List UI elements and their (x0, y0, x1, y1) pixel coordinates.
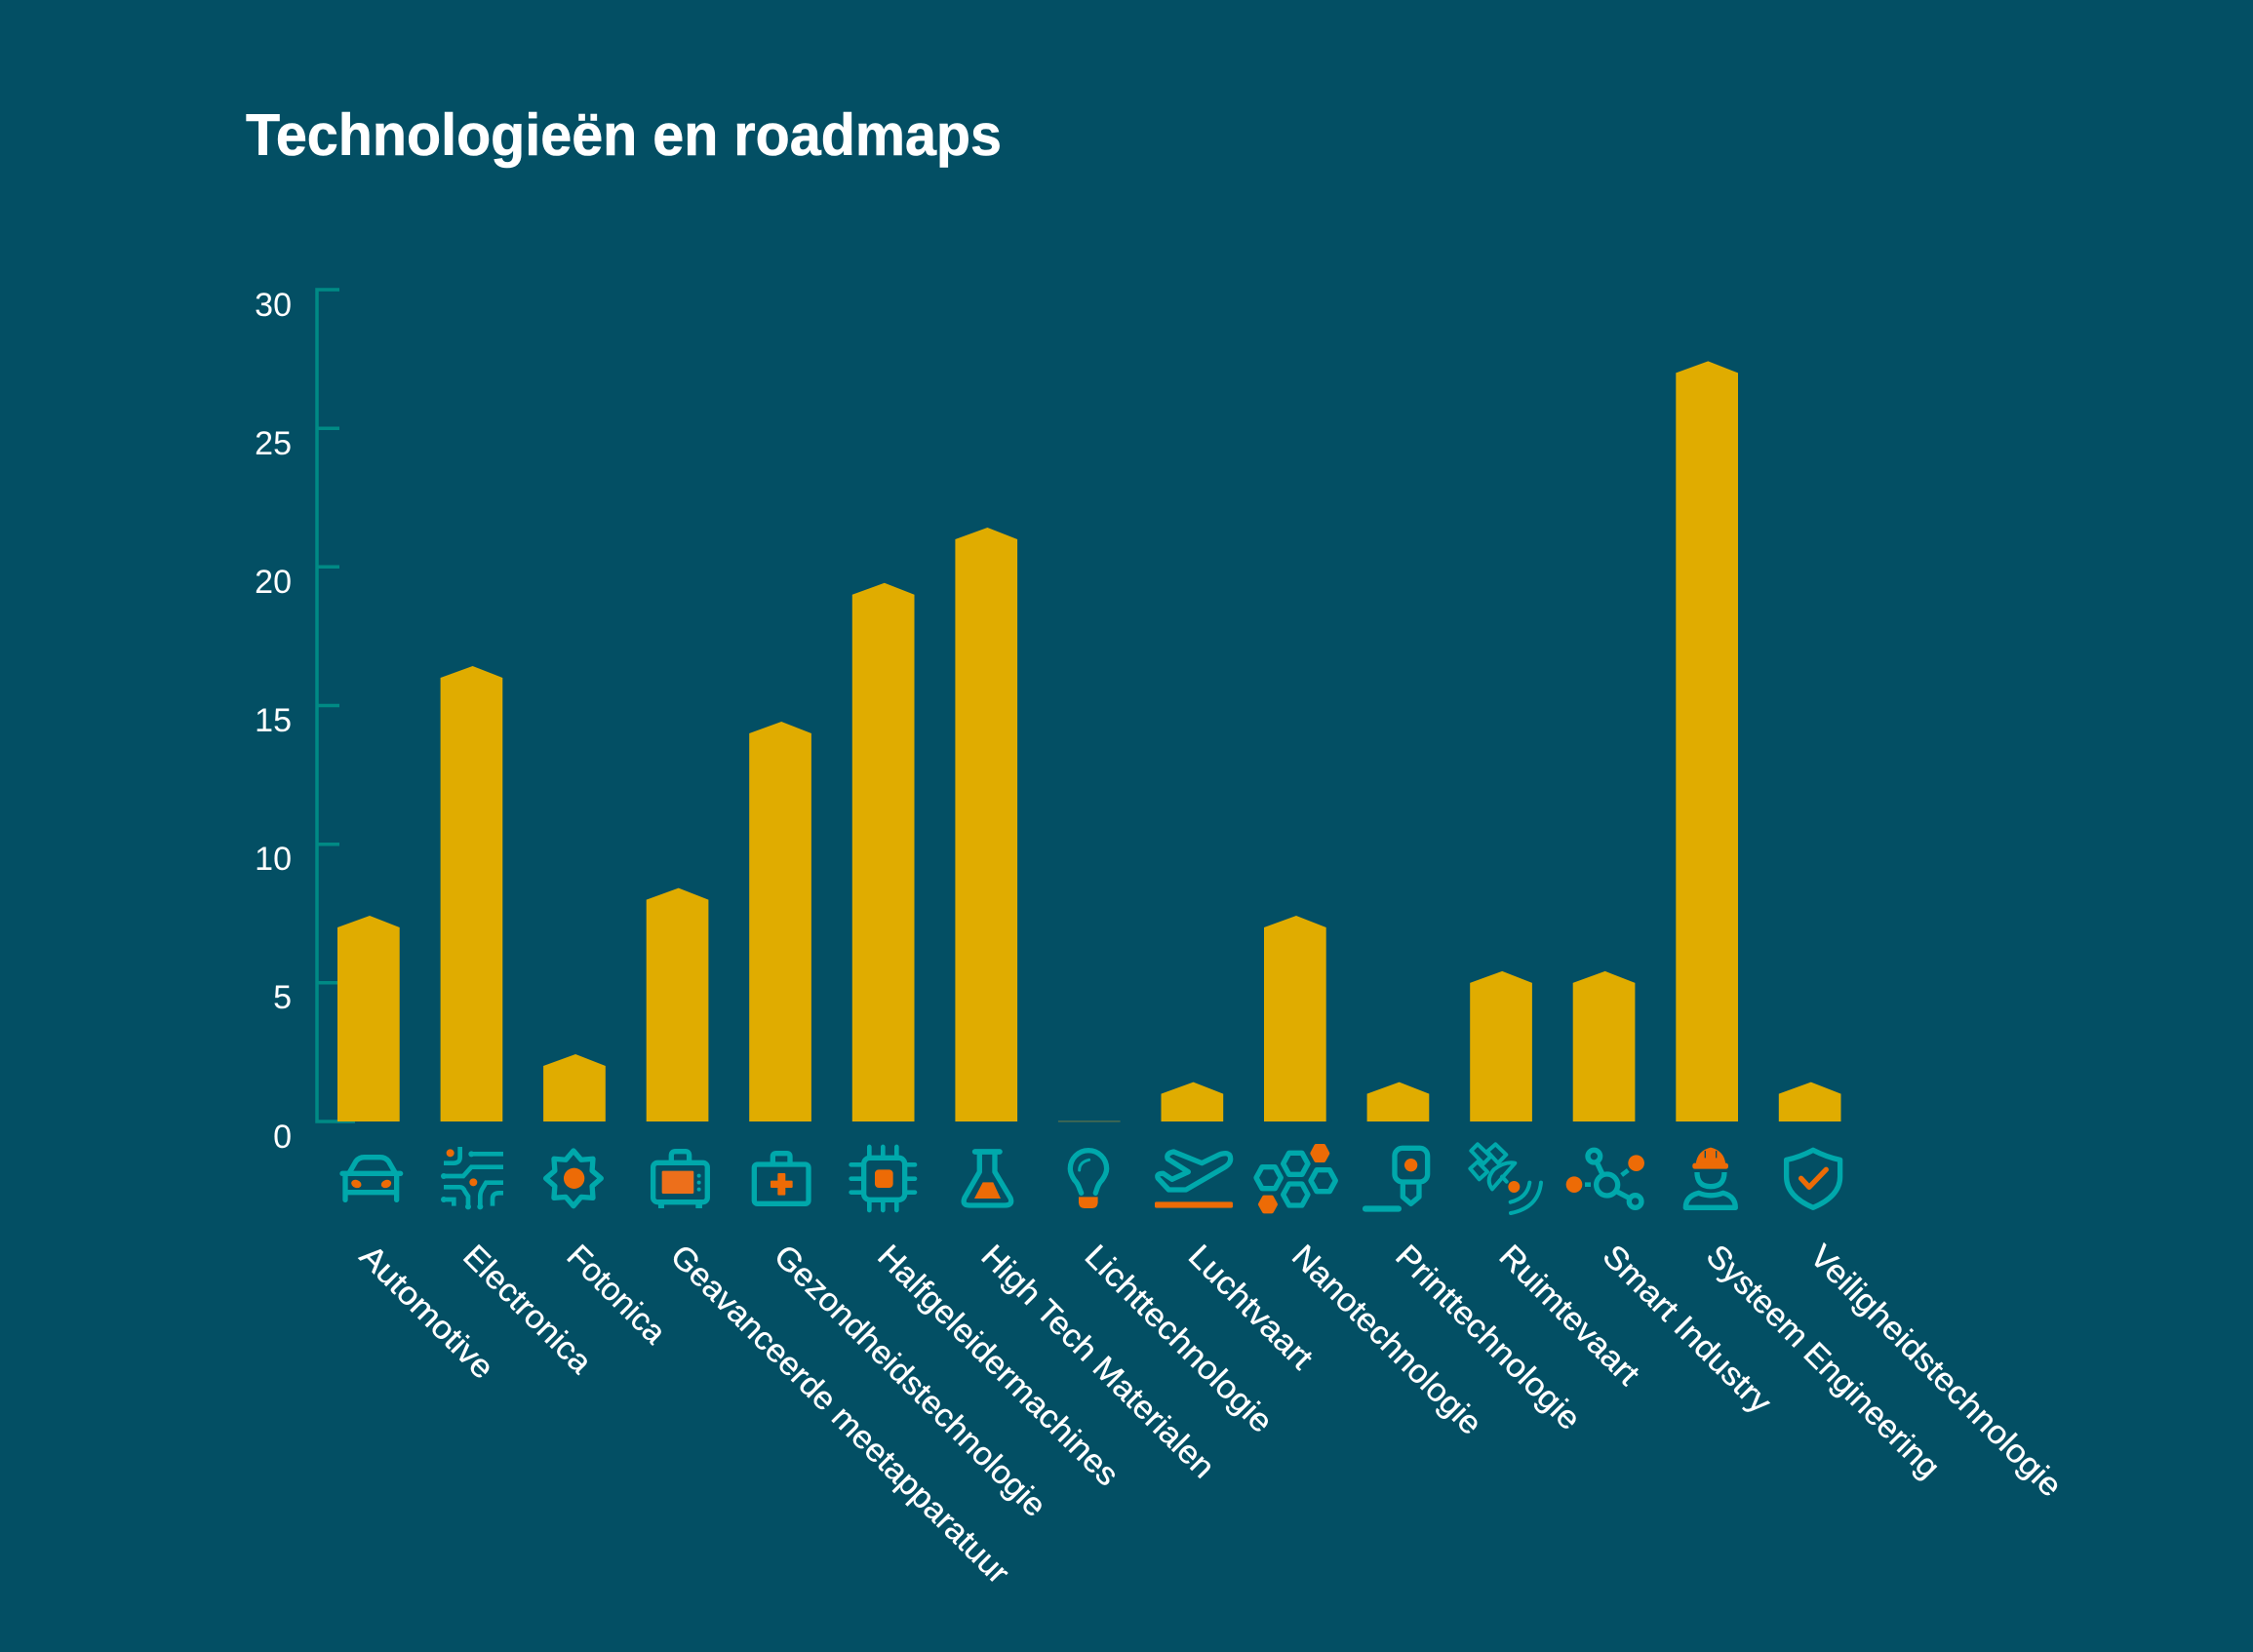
bar: Printtechnologie 1 (1367, 1082, 1429, 1121)
category labels: Lichttechnologie (1078, 1238, 1281, 1439)
y axis labels: 0 (273, 1119, 292, 1156)
category labels: Fotonica (560, 1238, 674, 1351)
icon: measuring device (653, 1152, 707, 1208)
category labels: Smart Industry (1596, 1238, 1779, 1421)
icon: engineer with helmet (1685, 1148, 1735, 1207)
icon row (342, 1144, 1840, 1213)
bar: Automotive 7 (337, 916, 400, 1121)
category labels: Ruimtevaart (1492, 1238, 1647, 1392)
icon: circuit board (441, 1147, 503, 1209)
y axis labels: 25 (255, 425, 292, 462)
icon: network nodes (1566, 1150, 1644, 1207)
category labels: Halfgeleidermachines (871, 1238, 1126, 1492)
icon: nano hexagons (1256, 1146, 1335, 1211)
y axis labels: 15 (255, 702, 292, 739)
category labels: Printtechnologie (1389, 1238, 1588, 1436)
bar: Electronica 16 (441, 666, 502, 1121)
icon: medical kit (754, 1154, 809, 1203)
category labels: Luchtvaart (1182, 1238, 1321, 1376)
icon: flask (964, 1152, 1011, 1205)
bar chart (337, 361, 1841, 1121)
y axis labels: 30 (255, 287, 292, 324)
bar: High Tech Materialen 21 (955, 528, 1017, 1121)
bar: Veiligheidstechnologie 1 (1779, 1082, 1841, 1121)
category labels: Electronica (456, 1238, 600, 1381)
category labels: Nanotechnologie (1285, 1238, 1489, 1441)
icon: airplane (1155, 1152, 1233, 1208)
category labels: High Tech Materialen (974, 1238, 1222, 1485)
icon: car (342, 1158, 401, 1200)
bar: Systeem Engineering 27 (1676, 361, 1738, 1121)
icon: chip (851, 1147, 915, 1210)
icon: 3D printer nozzle (1363, 1148, 1428, 1212)
category labels: Geavanceerde meetapparatuur (664, 1238, 1017, 1591)
category labels: Gezondheidstechnologie (768, 1238, 1053, 1523)
category labels: Automotive (353, 1238, 501, 1386)
bar: Gezondheidstechnologie 14 (749, 722, 811, 1121)
icon: photonics star (546, 1151, 601, 1206)
y axis with tick marks (317, 290, 355, 1121)
icon: satellite (1470, 1144, 1541, 1213)
bar: Luchtvaart 1 (1161, 1082, 1223, 1121)
bar: Halfgeleidermachines 19 (852, 583, 915, 1121)
y axis labels: 10 (255, 841, 292, 878)
category labels: Systeem Engineering (1700, 1238, 1948, 1485)
icon: shield with check (1787, 1150, 1840, 1207)
y axis labels (255, 287, 292, 1156)
category labels (353, 1238, 2070, 1591)
bar: Fotonica 2 (543, 1054, 606, 1121)
icon: light bulb (1070, 1151, 1107, 1208)
bar: Smart Industry 5 (1573, 971, 1635, 1121)
bar: Nanotechnologie 7 (1264, 916, 1326, 1121)
bar: Geavanceerde meetapparatuur 8 (647, 888, 708, 1121)
bar: Ruimtevaart 5 (1470, 971, 1532, 1121)
y axis labels: 20 (255, 564, 292, 601)
title: Technologieën en roadmaps (246, 102, 1002, 168)
category labels: Veiligheidstechnologie (1803, 1238, 2070, 1504)
y axis labels: 5 (273, 979, 292, 1016)
